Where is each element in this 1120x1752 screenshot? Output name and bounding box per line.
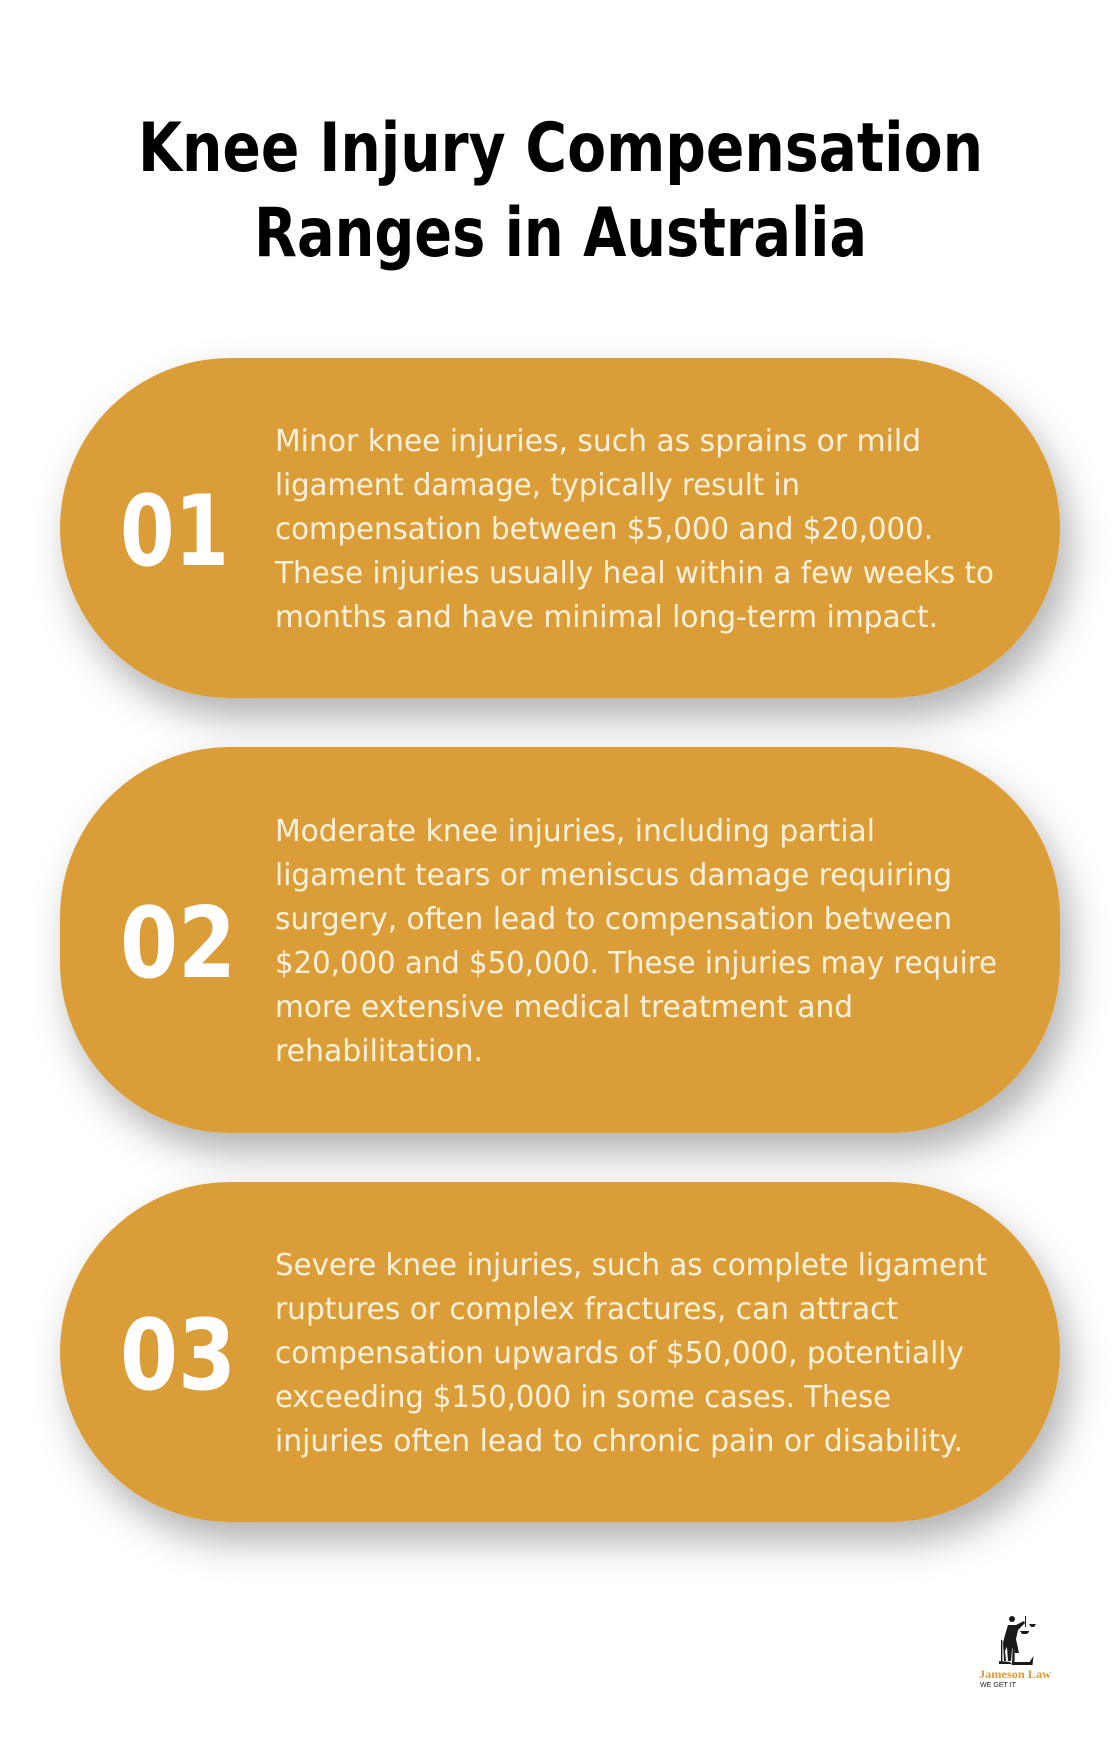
number 02: 02 (120, 887, 236, 1001)
title: Knee Injury Compensation (138, 109, 983, 188)
title (138, 109, 983, 273)
text: moderate injuries: $20,000 and $50,000. These injuries may require (275, 946, 997, 981)
text: minor injuries: These injuries usually heal within a few weeks to (274, 556, 994, 591)
text: minor injuries: Minor knee injuries, such as sprains or mild (275, 424, 921, 459)
brand name: Jameson Law (979, 1669, 1052, 1681)
text: severe injuries: compensation upwards of $50,000, potentially (275, 1336, 964, 1371)
text: moderate injuries: rehabilitation. (275, 1034, 483, 1069)
text: severe injuries: exceeding $150,000 in some cases. These (275, 1380, 891, 1415)
text: severe injuries: injuries often lead to chronic pain or disability. (275, 1424, 963, 1459)
text: moderate injuries (275, 814, 997, 1069)
text: minor injuries: ligament damage, typically result in (275, 468, 800, 503)
number 01: 01 (120, 475, 229, 589)
text: moderate injuries: surgery, often lead to compensation between (275, 902, 952, 937)
number 03: 03 (120, 1299, 236, 1413)
text: minor injuries: compensation between $5,000 and $20,000. (275, 512, 933, 547)
icon: lady justice (999, 1616, 1036, 1665)
text: moderate injuries: more extensive medical treatment and (275, 990, 853, 1025)
text: minor injuries (274, 424, 994, 635)
text: severe injuries: ruptures or complex fractures, can attract (275, 1292, 898, 1327)
text: severe injuries (275, 1248, 987, 1459)
panel: moderate injuries (60, 747, 1060, 1133)
title: Ranges in Australia (254, 194, 867, 273)
text: severe injuries: Severe knee injuries, such as complete ligament (275, 1248, 987, 1283)
panel: severe injuries (60, 1182, 1060, 1522)
text: minor injuries: months and have minimal long-term impact. (275, 600, 938, 635)
text: moderate injuries: ligament tears or meniscus damage requiring (275, 858, 952, 893)
tagline: WE GET IT (980, 1682, 1017, 1689)
panel: minor injuries (60, 358, 1060, 698)
text: moderate injuries: Moderate knee injuries, including partial (275, 814, 875, 849)
logo: Jameson Law (979, 1616, 1052, 1689)
